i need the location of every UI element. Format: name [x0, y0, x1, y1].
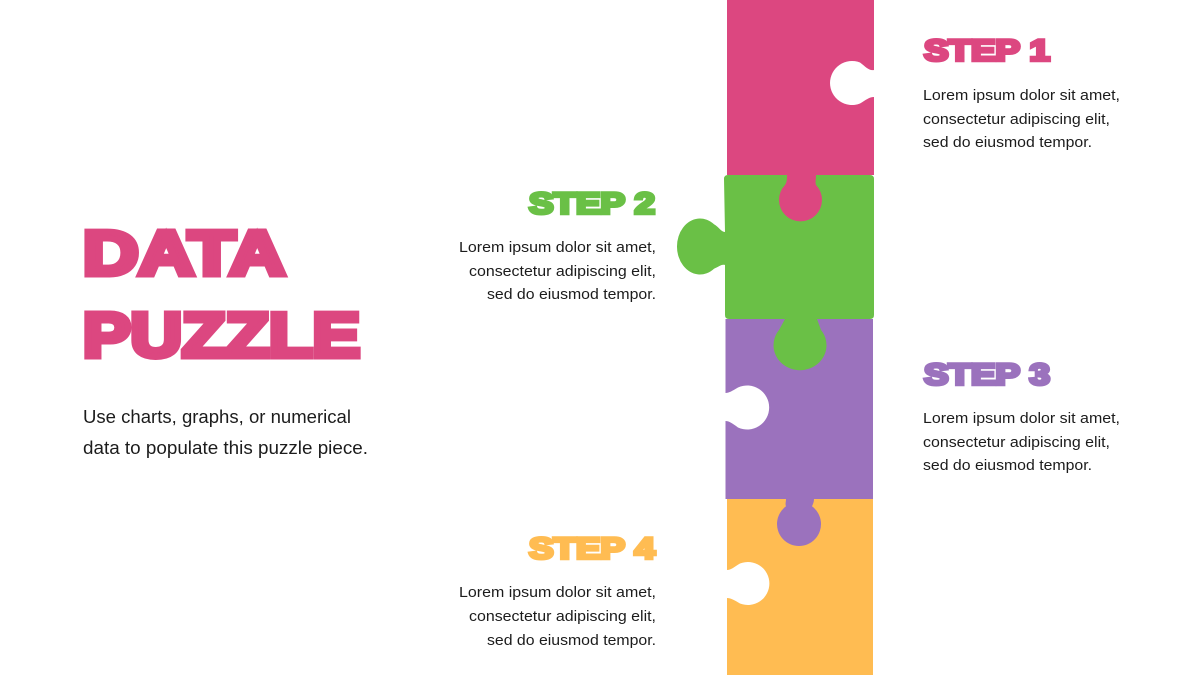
puzzle piece: step 4	[727, 499, 873, 675]
step 4 text	[459, 584, 656, 649]
intro text: data to populate this puzzle piece.	[83, 438, 368, 458]
step 1 heading: STEP 1	[924, 34, 1050, 68]
step 4 text: sed do eiusmod tempor.	[487, 632, 656, 649]
step 1 text: sed do eiusmod tempor.	[923, 134, 1092, 151]
step 3 heading: STEP 3	[924, 358, 1050, 392]
step 1	[923, 34, 1120, 151]
puzzle column	[677, 0, 874, 675]
step 4 text: Lorem ipsum dolor sit amet,	[459, 584, 656, 601]
step 4 heading: STEP 4	[529, 532, 655, 566]
title: PUZZLE	[83, 302, 360, 370]
step 4	[459, 532, 656, 649]
step 2	[459, 188, 656, 303]
step 3 text	[923, 410, 1120, 474]
step 3 text: consectetur adipiscing elit,	[923, 434, 1110, 451]
step 2 text: consectetur adipiscing elit,	[469, 263, 656, 280]
step 2 text	[459, 239, 656, 303]
step 3	[923, 358, 1120, 474]
step 4 text: consectetur adipiscing elit,	[469, 608, 656, 625]
intro text: Use charts, graphs, or numerical	[83, 407, 351, 427]
puzzle piece: step 3	[726, 319, 873, 546]
puzzle piece: step 2	[677, 175, 874, 370]
step 1 text	[923, 87, 1120, 151]
step 1 text: consectetur adipiscing elit,	[923, 111, 1110, 128]
step 3 text: Lorem ipsum dolor sit amet,	[923, 410, 1120, 427]
title	[83, 220, 360, 370]
step 3 text: sed do eiusmod tempor.	[923, 457, 1092, 474]
step 2 text: Lorem ipsum dolor sit amet,	[459, 239, 656, 256]
title: DATA	[83, 220, 285, 288]
puzzle piece: step 1	[727, 0, 874, 221]
intro text	[83, 407, 368, 458]
step 2 text: sed do eiusmod tempor.	[487, 286, 656, 303]
step 2 heading: STEP 2	[529, 188, 655, 220]
step 1 text: Lorem ipsum dolor sit amet,	[923, 87, 1120, 104]
